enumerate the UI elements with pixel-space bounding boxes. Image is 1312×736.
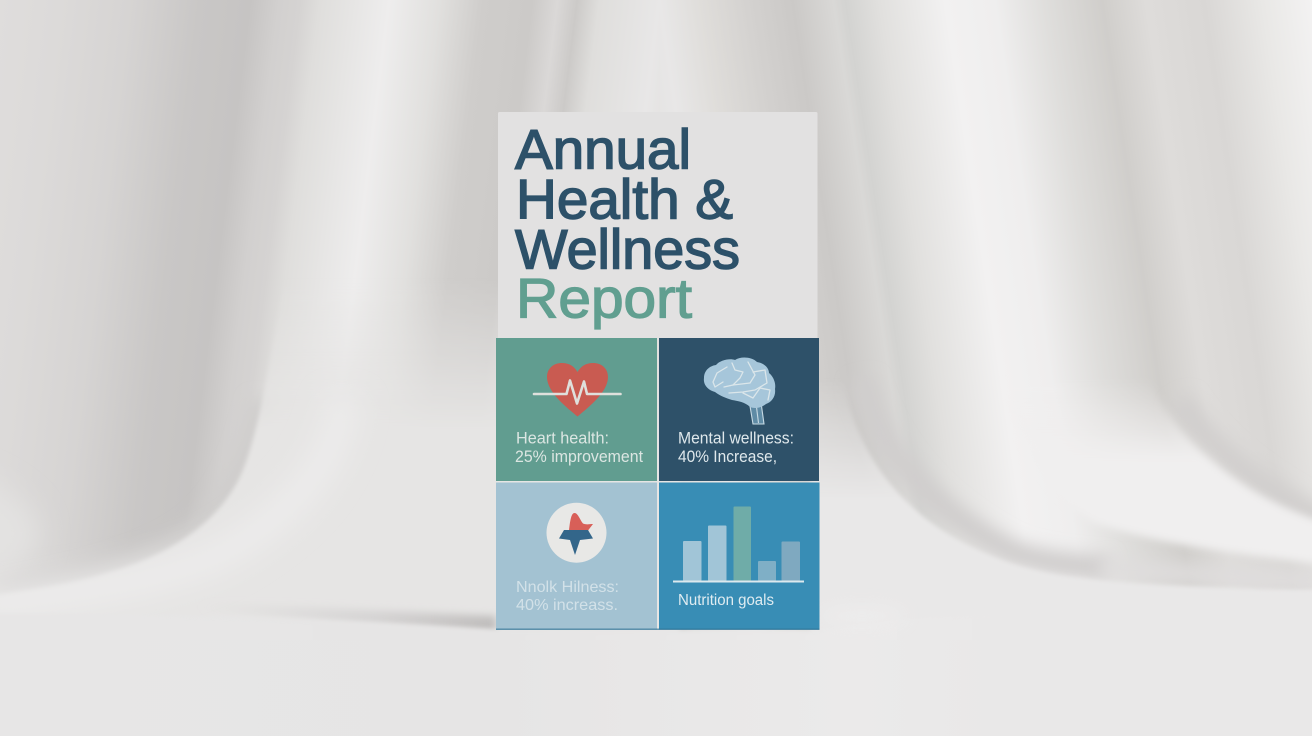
text: nutrition goals label: Nutrition goals: [678, 592, 774, 609]
text: mental wellness stat: Mental wellness:: [678, 430, 794, 448]
icon: brain: [704, 358, 775, 424]
title: dark lines: Annual: [515, 118, 691, 180]
text: heart health stat: [515, 430, 643, 466]
cover bottom edge: [496, 628, 820, 630]
title: dark lines: [515, 118, 740, 280]
panel: mental wellness: [659, 338, 819, 481]
icon: heart with pulse: [534, 363, 620, 416]
text: illness stat: [516, 579, 619, 614]
text: heart health stat: 25% improvement: [515, 448, 643, 466]
title: Report: Report: [516, 266, 692, 330]
text: heart health stat: Heart health:: [516, 430, 609, 448]
text: mental wellness stat: [678, 430, 794, 466]
title: dark lines: Wellness: [515, 218, 740, 280]
icon: star badge: [546, 503, 606, 563]
bar chart: [673, 506, 804, 582]
panel: nutrition goals: [659, 482, 820, 630]
panel: heart health: [496, 338, 657, 481]
text: mental wellness stat: 40% Increase,: [678, 448, 777, 466]
title panel: [498, 112, 818, 339]
text: illness stat: 40% increass.: [516, 597, 618, 614]
title: dark lines: Health &: [516, 168, 733, 230]
report cover: [496, 112, 820, 630]
panel: illness stat: [496, 482, 657, 630]
background: floor surface: [0, 590, 1312, 736]
text: illness stat: Nnolk Hilness:: [516, 579, 619, 596]
